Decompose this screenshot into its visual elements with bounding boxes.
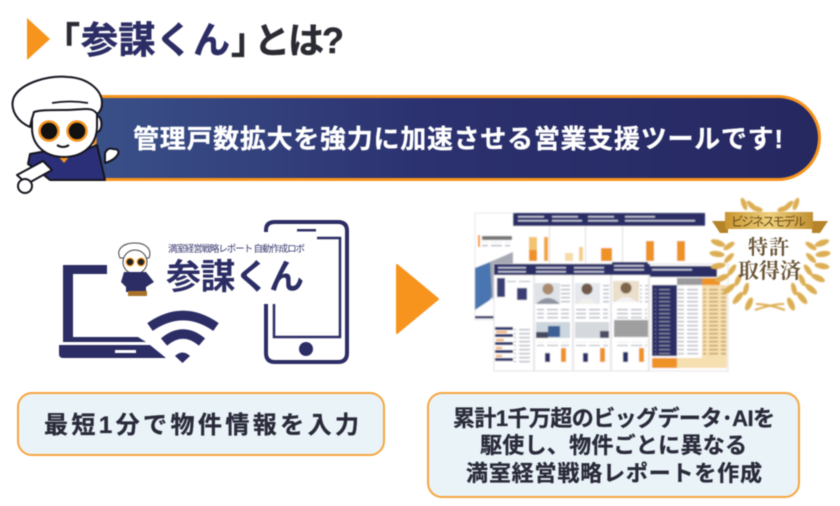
patent text 2: 取得済: [738, 259, 801, 283]
banner: [95, 96, 819, 180]
report collage: [475, 213, 728, 371]
logo wordmark: 参謀くん: [166, 258, 304, 297]
report front row: [494, 262, 728, 371]
title: とは?: [254, 20, 344, 61]
logo subtitle: 満室経営戦略レポート 自動作成ロボ: [168, 243, 305, 255]
report back row: [513, 213, 705, 263]
patent text: 特許: [748, 236, 789, 259]
smartphone icon: [266, 222, 347, 362]
mascot body: [28, 145, 105, 180]
report cover: [475, 213, 515, 320]
mascot character: [12, 77, 118, 193]
first page nav: [497, 278, 505, 297]
mascot mouth: [57, 145, 69, 147]
ribbon: [712, 212, 828, 239]
title: 「: [44, 20, 80, 61]
mascot eyes: [40, 122, 58, 140]
title: 参謀くん: [81, 20, 230, 61]
mascot ear: [92, 116, 102, 132]
wifi icon: [150, 316, 216, 363]
laurel wreath: [709, 197, 831, 312]
people photos: [535, 283, 560, 304]
mascot fan: [17, 161, 52, 184]
patent badge: [709, 197, 831, 312]
room photos: [536, 322, 570, 338]
title arrow icon: [27, 18, 50, 60]
banner text: 管理戸数拡大を強力に加速させる営業支援ツールです!: [133, 124, 783, 154]
table panel: [652, 278, 727, 368]
mascot hand: [105, 148, 118, 163]
callout left text: 最短1分で物件情報を入力: [44, 412, 359, 439]
ribbon text: ビジネスモデル: [731, 214, 806, 229]
photo side text: [561, 283, 570, 303]
callout right text: [453, 406, 775, 486]
front bars: [545, 353, 550, 362]
title: [44, 20, 344, 61]
laptop icon: [59, 265, 166, 358]
mascot collar: [58, 156, 70, 163]
callout right text: 駆使し、物件ごとに異なる: [480, 433, 747, 458]
mascot hair: [12, 77, 102, 127]
callout left: [18, 393, 384, 455]
callout right text: 累計1千万超のビッグデータ･AIを: [453, 406, 775, 431]
callout right: [428, 393, 799, 497]
mascot face: [32, 108, 97, 157]
callout right text: 満室経営戦略レポートを作成: [466, 461, 762, 486]
logo: small mascot: [119, 243, 154, 296]
title: 」: [231, 20, 267, 61]
chevron arrow: [397, 265, 438, 333]
